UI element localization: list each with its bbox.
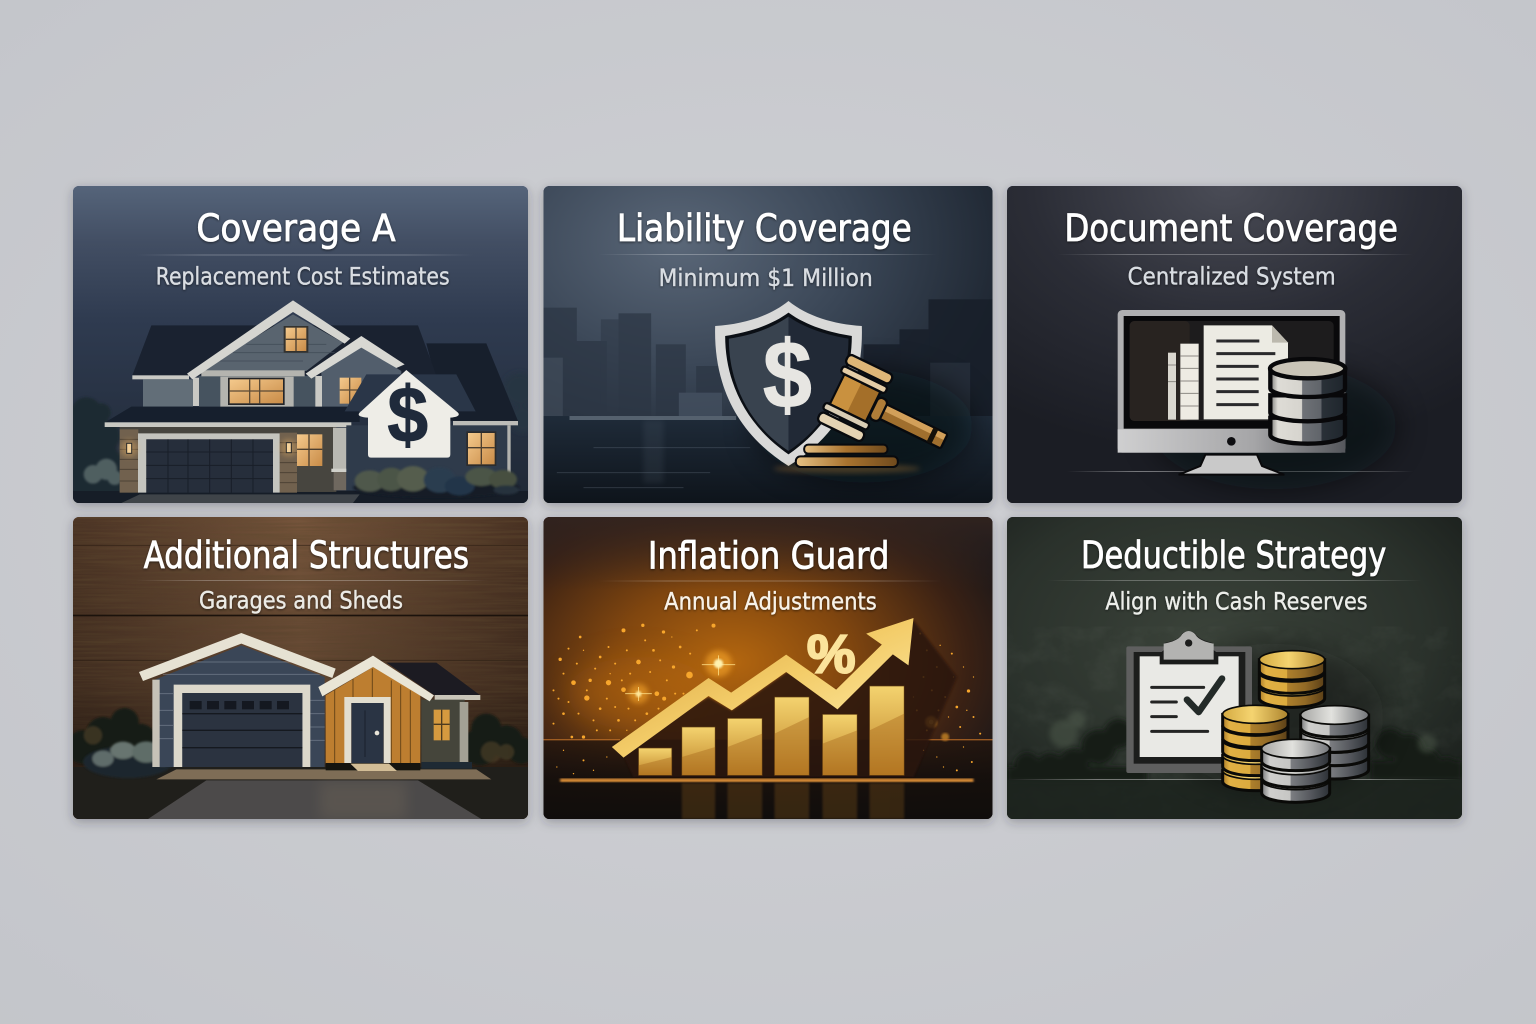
subheading: Garages and Sheds: Garages and Sheds xyxy=(199,587,403,615)
panel: Coverage A xyxy=(63,186,536,503)
icon: coin stacks xyxy=(1223,651,1369,802)
icon: dollar house badge: $ xyxy=(387,370,428,458)
icon: shield with dollar xyxy=(715,301,862,466)
icon: percent sign: % xyxy=(807,625,855,684)
panel: Additional Structures xyxy=(66,517,535,819)
foliage silhouette xyxy=(1007,719,1462,782)
icon: dollar house badge xyxy=(359,370,459,458)
heading: Additional Structures: Additional Structures xyxy=(144,533,469,577)
subheading: Align with Cash Reserves: Align with Cash Reserves xyxy=(1105,587,1368,615)
illustration: city skyline over water xyxy=(544,299,992,503)
chart: rising gold bars with arrow xyxy=(612,618,957,777)
heading: Deductible Strategy: Deductible Strategy xyxy=(1081,533,1386,577)
panel: Liability Coverage xyxy=(544,186,992,503)
illustration: night house with dollar badge xyxy=(63,300,536,503)
heading: Document Coverage: Document Coverage xyxy=(1064,206,1398,250)
icon: gavel xyxy=(773,354,961,475)
subheading: Minimum $1 Million: Minimum $1 Million xyxy=(658,264,873,292)
panel: Document Coverage xyxy=(1007,186,1462,503)
subheading: Centralized System: Centralized System xyxy=(1128,262,1336,290)
heading: Coverage A: Coverage A xyxy=(196,206,396,250)
heading: Inflation Guard: Inflation Guard xyxy=(648,534,889,578)
icon: monitor with documents and database xyxy=(1118,310,1397,489)
heading: Liability Coverage: Liability Coverage xyxy=(617,206,912,250)
illustration: garage and shed xyxy=(66,633,535,819)
panel: Inflation Guard xyxy=(544,517,992,819)
subheading: Annual Adjustments: Annual Adjustments xyxy=(664,587,877,615)
subheading: Replacement Cost Estimates: Replacement Cost Estimates xyxy=(156,262,450,290)
icon: clipboard with checklist xyxy=(1126,631,1384,790)
decoration: golden particles xyxy=(552,624,981,774)
panel: Deductible Strategy xyxy=(1007,517,1462,819)
icon: shield with dollar: $ xyxy=(763,322,812,429)
